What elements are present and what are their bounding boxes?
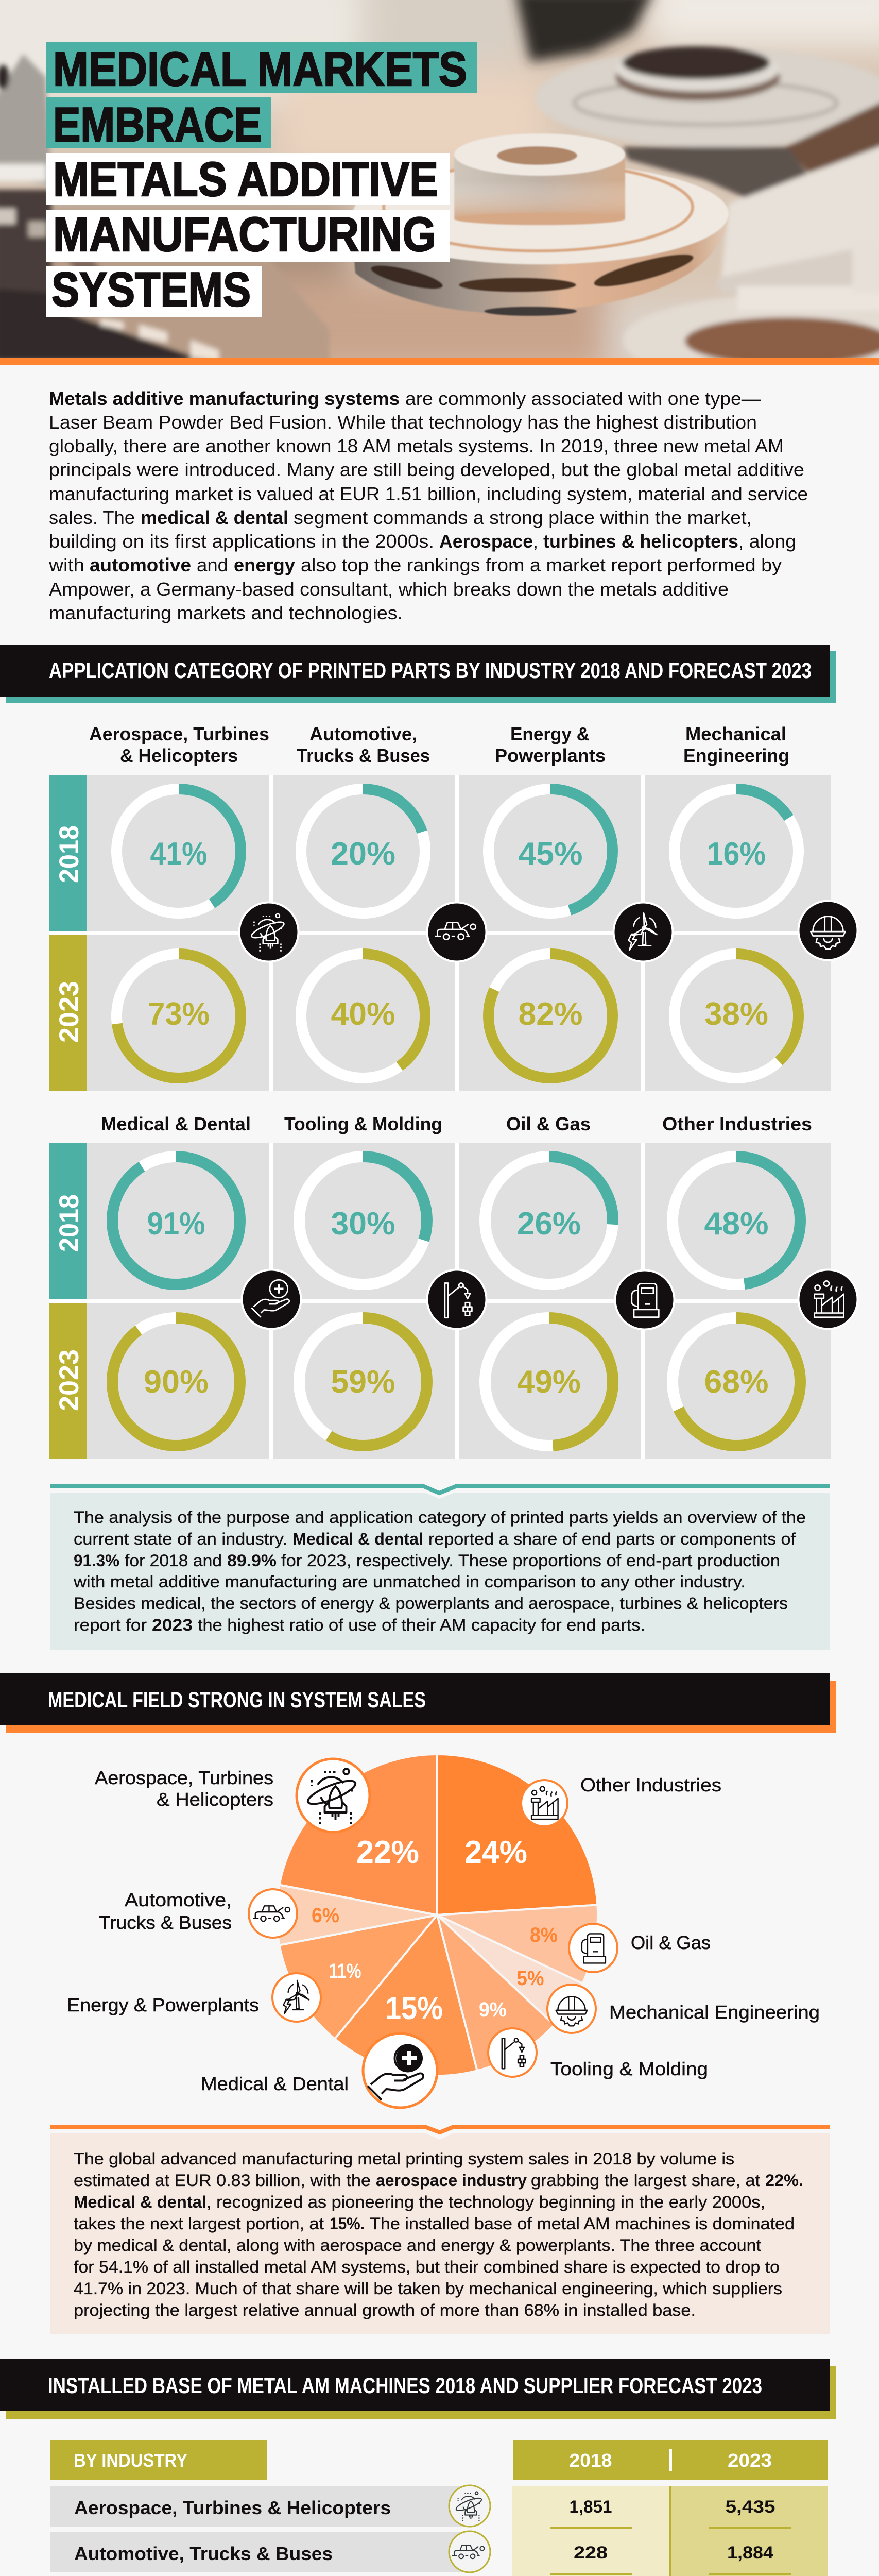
donut: aerospace 2023: 73% (148, 996, 210, 1032)
pie labels: Energy & Powerplants (67, 1994, 259, 2015)
slice: medical 15% (335, 1915, 477, 2076)
pie chart: system sales by industry: 5% (517, 1967, 544, 1990)
slice: mechanical engineering 5% (437, 1915, 582, 2025)
intro text block: globally, there are another known 18 AM metals systems. In 2019, three new metal AM (49, 435, 784, 456)
row: automotive: 228 (574, 2543, 608, 2563)
icon: factory badge (798, 1269, 858, 1329)
intro text block: Laser Beam Powder Bed Fusion. While that technology has the highest distribution (49, 412, 757, 433)
donut grid: second set (49, 1143, 831, 1459)
pie chart: system sales by industry: 6% (312, 1904, 339, 1927)
table header: by industry (50, 2440, 267, 2480)
donut: aerospace 2023 (116, 954, 241, 1078)
intro text block: energy (234, 554, 295, 575)
callout: system sales: takes the next largest portion, at (74, 2214, 324, 2233)
donut: medical 2018 (112, 1157, 240, 1284)
callout: application analysis: with metal additive manufacturing are unmatched in comparison to any other industry. (73, 1572, 746, 1591)
industry labels row one (89, 723, 789, 766)
section header: application category (0, 645, 836, 703)
icon: helmet badge (798, 901, 858, 960)
intro text block: with (48, 554, 84, 575)
pie labels: Aerospace, Turbines (95, 1767, 273, 1788)
industry labels row one: Automotive, (309, 723, 417, 744)
donut: other 2018 (673, 1157, 800, 1284)
table: installed base by industry (50, 2440, 828, 2576)
slice: energy 11% (279, 1915, 437, 2039)
industry labels row one: Aerospace, Turbines (89, 723, 269, 744)
pie chart: system sales by industry: 8% (530, 1924, 558, 1946)
callout: system sales: The installed base of metal AM machines is dominated (370, 2214, 795, 2233)
table columns (512, 2486, 828, 2576)
intro text block: segment commands a strong place within the market, (294, 507, 752, 528)
donut grid: second set: 2023 (54, 1349, 84, 1411)
row: aerospace: Aerospace, Turbines & Helicopters (74, 2497, 391, 2518)
icon badges: first set (239, 901, 858, 961)
pie labels: Other Industries (580, 1774, 721, 1795)
title: MEDICAL MARKETS (53, 42, 467, 96)
industry labels row two (101, 1113, 812, 1134)
title: MANUFACTURING (53, 207, 436, 261)
donut: mechanical 2018 (675, 789, 798, 913)
callout: system sales: 22%. (765, 2171, 803, 2190)
pie labels: Medical & Dental (201, 2073, 349, 2094)
slice: other industries 24% (437, 1754, 597, 1915)
industry labels row one: Engineering (683, 745, 789, 766)
donut: energy 2018: 45% (518, 836, 583, 872)
table header: years (513, 2440, 828, 2480)
pie labels (67, 1767, 820, 2094)
pie labels: Mechanical Engineering (609, 2002, 820, 2023)
table header: by industry: BY INDUSTRY (74, 2450, 187, 2471)
icon: fuel pump badge (615, 1270, 675, 1329)
callout: system sales: projecting the largest relative annual growth of more than 68% in installed base. (74, 2301, 696, 2319)
industry labels row one: Mechanical (685, 723, 786, 744)
row: automotive: Automotive, Trucks & Buses (74, 2543, 333, 2564)
callout: system sales: The global advanced manufacturing metal printing system sales in 2018 by volume is (74, 2149, 734, 2168)
title: EMBRACE (53, 97, 262, 151)
callout: system sales: , recognized as pioneering the technology beginning in the early 2000s, (206, 2193, 765, 2211)
icon badges: second set (242, 1269, 858, 1329)
callout: system sales (50, 2127, 830, 2334)
donut: oil 2023: 49% (517, 1364, 581, 1400)
donut grid: first set: 2018 (54, 825, 84, 883)
donut: automotive 2018 (301, 789, 425, 913)
callout: system sales: Medical & dental (74, 2193, 206, 2211)
donut: medical 2023 (112, 1318, 240, 1446)
title: METALS ADDITIVE (53, 152, 438, 206)
callout: application analysis: 91.3% (74, 1551, 119, 1570)
section header: system sales (0, 1673, 836, 1733)
intro text block: are commonly associated with one type— (405, 388, 761, 409)
row: aerospace: 5,435 (725, 2497, 775, 2517)
title: SYSTEMS (51, 262, 251, 316)
pie chart: system sales by industry: 24% (464, 1835, 527, 1870)
industry labels row two: Other Industries (662, 1113, 812, 1134)
callout: application analysis: report for (74, 1616, 147, 1634)
intro text block: Ampower, a Germany-based consultant, which breaks down the metals additive (49, 579, 729, 600)
table header: years: 2023 (728, 2450, 772, 2471)
callout: application analysis: 89.9% (227, 1551, 277, 1570)
pie chart: system sales by industry: 22% (356, 1835, 419, 1870)
intro text block: manufacturing market is valued at EUR 1.51 billion, including system, material and service (49, 483, 808, 504)
donut: automotive 2023: 40% (331, 996, 395, 1032)
icon: factory (521, 1780, 567, 1826)
hero photo: metal parts (0, 0, 879, 385)
industry labels row one: Trucks & Buses (297, 745, 430, 766)
row: automotive: 1,884 (727, 2543, 773, 2563)
donut: medical 2018: 91% (147, 1206, 205, 1242)
icon: fuel pump (569, 1924, 617, 1972)
icon: rocket (297, 1759, 370, 1832)
donut: mechanical 2023: 38% (704, 996, 768, 1032)
intro text block: automotive (90, 554, 191, 575)
donut: other 2023 (673, 1318, 800, 1446)
icon: car badge (427, 903, 486, 961)
icon: helmet (547, 1985, 596, 2033)
intro text block: manufacturing markets and technologies. (49, 602, 403, 623)
donut: tooling 2023: 59% (331, 1364, 395, 1400)
industry labels row two: Oil & Gas (506, 1113, 591, 1134)
intro text block: , (533, 531, 538, 552)
intro text block: also top the rankings from a market report performed by (301, 554, 782, 575)
pie labels: Oil & Gas (631, 1932, 711, 1953)
callout: system sales: 41.7% in 2023. Much of that share will be taken by mechanical engineering, which suppliers (74, 2279, 782, 2298)
slice: automotive 6% (277, 1885, 437, 1945)
intro text block: turbines & helicopters (543, 531, 738, 552)
donut: automotive 2018: 20% (331, 836, 395, 872)
pie labels: Automotive, (125, 1889, 232, 1910)
industry labels row one: Energy & (510, 723, 590, 744)
pie chart: system sales by industry: 11% (329, 1960, 361, 1982)
icon: crane badge (427, 1269, 486, 1329)
donut: other 2018: 48% (704, 1206, 768, 1242)
donut: oil 2018: 26% (517, 1206, 581, 1242)
intro text block: Aerospace (439, 531, 533, 552)
pie labels: Trucks & Buses (99, 1912, 232, 1933)
slice: oil and gas 8% (437, 1905, 598, 1984)
donut: tooling 2018 (299, 1157, 427, 1284)
icon: crane (488, 2028, 537, 2077)
icon: medical hand (363, 2033, 437, 2108)
orange band under hero (0, 358, 879, 365)
icon: wind turbine badge (614, 903, 673, 961)
pie chart: system sales by industry: 9% (479, 1998, 507, 2021)
donut grid: first set (49, 775, 831, 1091)
icon: wind turbine (272, 1973, 321, 2022)
callout: system sales: 15%. (330, 2214, 365, 2233)
pie labels: & Helicopters (157, 1789, 273, 1810)
callout: application analysis: The analysis of the purpose and application category of printed parts yields an overview of the (74, 1508, 806, 1527)
donut: aerospace 2018: 41% (150, 836, 207, 872)
table header: years: 2018 (570, 2450, 612, 2471)
industry labels row one: & Helicopters (120, 745, 238, 766)
slice: aerospace 22% (279, 1754, 437, 1915)
intro text block (48, 388, 808, 623)
callout: application analysis: for 2023, respectively. These proportions of end-part production (281, 1551, 780, 1570)
pie icons (249, 1759, 617, 2108)
callout: application analysis (50, 1486, 830, 1650)
callout: system sales: aerospace industry (376, 2171, 527, 2190)
donut: energy 2023: 82% (518, 996, 583, 1032)
donut: energy 2023 (488, 954, 613, 1078)
icon: medical hand badge (242, 1269, 301, 1329)
industry labels row one: Powerplants (495, 745, 606, 766)
callout: application analysis: 2023 (152, 1616, 193, 1634)
pie labels: Tooling & Molding (550, 2058, 708, 2079)
section header: installed base (0, 2359, 836, 2419)
callout: system sales: for 54.1% of all installed metal AM systems, but their combined share is expected to drop to (74, 2258, 780, 2276)
donut: other 2023: 68% (704, 1364, 768, 1400)
industry labels row two: Medical & Dental (101, 1113, 251, 1134)
section header: system sales: MEDICAL FIELD STRONG IN SYSTEM SALES (48, 1688, 426, 1713)
donut: oil 2018 (485, 1157, 613, 1284)
donut: automotive 2023 (301, 954, 425, 1078)
donut: tooling 2018: 30% (331, 1206, 395, 1242)
intro text block: medical & dental (141, 507, 288, 528)
callout: application analysis: Medical & dental (292, 1530, 423, 1548)
intro text block: and (197, 554, 228, 575)
donut: aerospace 2018 (116, 789, 241, 913)
callout: system sales: by medical & dental, along with aerospace and energy & powerplants. The three account (74, 2236, 761, 2255)
icon: rocket badge (239, 903, 299, 961)
callout: system sales: estimated at EUR 0.83 billion, with the (74, 2171, 371, 2190)
pie chart: system sales by industry (277, 1754, 598, 2076)
intro text block: building on its first applications in the 2000s. (49, 531, 434, 552)
donut: mechanical 2018: 16% (707, 836, 766, 872)
donut: energy 2018 (488, 789, 613, 913)
title (46, 42, 477, 317)
callout: application analysis: for 2018 and (125, 1551, 222, 1570)
row: aerospace (50, 2485, 775, 2527)
callout: application analysis: reported a share of end parts or components of (428, 1530, 796, 1548)
donut: oil 2023 (485, 1318, 613, 1446)
donut: tooling 2023 (299, 1318, 427, 1446)
pie chart: system sales by industry: 15% (385, 1991, 443, 2026)
donut: mechanical 2023 (675, 954, 798, 1078)
callout: application analysis: current state of an industry. (74, 1530, 287, 1548)
callout: application analysis: the highest ratio of use of their AM capacity for end parts. (198, 1616, 645, 1634)
icon: car (249, 1889, 297, 1938)
slice: tooling 9% (437, 1915, 554, 2071)
intro text block: , along (738, 531, 796, 552)
donut grid: first set: 2023 (54, 981, 84, 1043)
intro text block: sales. The (49, 507, 135, 528)
donut grid: second set: 2018 (54, 1194, 84, 1252)
row: aerospace: 1,851 (570, 2497, 612, 2517)
callout: application analysis: Besides medical, the sectors of energy & powerplants and aerospace, turbines & helicopters (74, 1594, 788, 1613)
callout: system sales: grabbing the largest share, at (531, 2171, 760, 2190)
row: automotive (50, 2531, 773, 2572)
intro text block: principals were introduced. Many are still being developed, but the global metal additive (49, 459, 804, 480)
intro text block: Metals additive manufacturing systems (49, 388, 400, 409)
industry labels row two: Tooling & Molding (284, 1113, 442, 1134)
donut: medical 2023: 90% (144, 1364, 209, 1400)
